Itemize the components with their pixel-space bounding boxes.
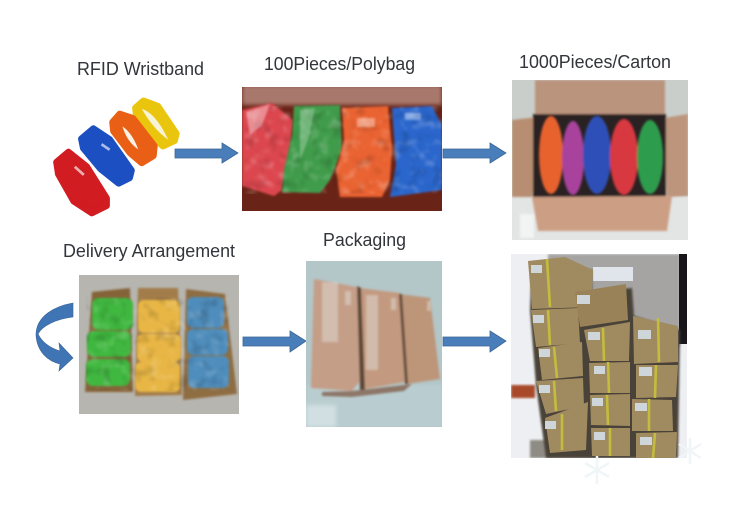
five coloured bags xyxy=(539,116,663,195)
title: Packaging: Packaging xyxy=(323,230,406,250)
photo: three wrapped cartons on floor xyxy=(306,261,442,427)
arrow: packaging to stacked cartons xyxy=(443,331,506,352)
arrow: wristband to polybag xyxy=(175,143,238,163)
carton flaps and body xyxy=(512,80,688,231)
yellow wristband xyxy=(136,101,176,146)
three cartons xyxy=(311,279,440,397)
arrow: curved turn from carton row to delivery row xyxy=(36,303,73,371)
arrow: delivery to packaging xyxy=(243,331,306,352)
orange wristband xyxy=(113,114,154,163)
green polybag xyxy=(282,105,342,193)
dark gaps behind stack xyxy=(530,262,680,458)
photo: delivery boxes with three colours xyxy=(79,275,239,414)
three open boxes xyxy=(85,288,237,400)
icon: faint snowflake lower middle xyxy=(585,456,609,484)
icon: faint snowflake lower right xyxy=(679,438,701,464)
shipping labels xyxy=(531,265,652,445)
blue wristband xyxy=(82,129,131,183)
carton stack xyxy=(528,257,678,458)
arrow: polybag to carton xyxy=(443,143,506,163)
icon: four RFID wristbands xyxy=(57,101,176,213)
blue polybag xyxy=(390,106,442,197)
yellow straps xyxy=(547,259,659,458)
orange polybag xyxy=(336,106,392,197)
photo: polybags on table xyxy=(242,85,442,211)
photo: open carton with bags xyxy=(512,80,688,240)
red wristband xyxy=(57,152,106,213)
yellow bags xyxy=(135,300,181,392)
title: Delivery Arrangement: Delivery Arrangement xyxy=(63,241,235,261)
green bags xyxy=(86,298,133,386)
photo: stacked cartons on trolley xyxy=(511,254,687,458)
plastic highlights xyxy=(246,104,421,160)
title: 100Pieces/Polybag: 100Pieces/Polybag xyxy=(264,54,415,74)
title: 1000Pieces/Carton: 1000Pieces/Carton xyxy=(519,52,671,72)
blue bags xyxy=(187,297,229,388)
title: RFID Wristband: RFID Wristband xyxy=(77,59,204,79)
red polybag xyxy=(242,103,293,196)
